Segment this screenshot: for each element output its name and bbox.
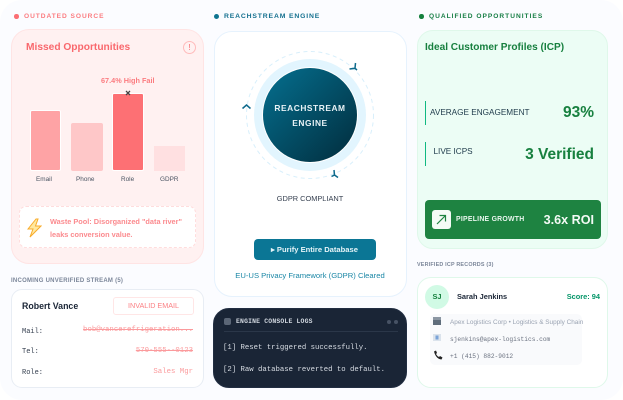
heading: incoming stream: INCOMING UNVERIFIED STREAM (5) <box>11 278 123 284</box>
axis labels: Email <box>36 176 52 183</box>
panel: ideal customer profiles <box>417 30 608 249</box>
name: Sarah Jenkins <box>457 292 507 301</box>
row: role: Role: <box>22 369 43 377</box>
contact details <box>430 314 582 365</box>
marker: x <box>126 90 130 96</box>
row: mail <box>22 326 193 336</box>
axis labels: Role <box>121 176 134 183</box>
bar: phone <box>71 123 103 171</box>
row: role <box>22 368 193 377</box>
metric: live icps <box>425 142 596 166</box>
avatar <box>425 285 449 309</box>
row: tel <box>22 347 193 356</box>
panel: pipeline growth <box>425 200 601 239</box>
bar: gdpr <box>154 146 185 171</box>
button: purify: ▸ Purify Entire Database <box>271 244 358 254</box>
metric: average engagement <box>425 101 596 125</box>
waste pool text <box>50 217 182 239</box>
callout: waste pool <box>19 206 196 248</box>
text: framework cleared: EU-US Privacy Framework (GDPR) Cleared <box>235 270 385 280</box>
row: role: Sales Mgr <box>153 368 193 376</box>
button: purify <box>254 238 376 260</box>
badge: invalid email <box>113 297 194 315</box>
panel: console <box>213 308 407 388</box>
metric: average engagement: 93% <box>563 104 594 121</box>
icon: email <box>433 334 441 341</box>
metric: average engagement: AVERAGE ENGAGEMENT <box>430 108 529 117</box>
bar chart <box>30 90 185 183</box>
panel: pipeline growth: PIPELINE GROWTH <box>456 216 524 223</box>
icon: building <box>433 317 441 325</box>
waste pool text: leaks conversion value. <box>50 230 132 239</box>
icon: alert: ! <box>188 43 191 52</box>
log line 1: [1] Reset triggered successfully. <box>223 344 368 352</box>
panel: missed opportunities <box>11 29 204 264</box>
row: tel: 570-555--0123 <box>136 347 193 355</box>
row: mail: Mail: <box>22 328 43 336</box>
section header: outdated source: OUTDATED SOURCE <box>24 13 104 20</box>
axis labels <box>36 176 178 183</box>
console header: ENGINE CONSOLE LOGS <box>236 318 313 325</box>
score: Score: 94 <box>567 292 600 301</box>
bar: email <box>30 110 61 171</box>
contact details: Apex Logistics Corp • Logistics & Supply Chain <box>450 318 583 326</box>
log line 2: [2] Raw database reverted to default. <box>223 366 385 374</box>
panel: pipeline growth: 3.6x ROI <box>544 213 594 227</box>
panel: engine <box>214 31 407 297</box>
waste pool text: Waste Pool: Disorganized "data river" <box>50 217 182 226</box>
badge: invalid email: INVALID EMAIL <box>128 301 179 310</box>
engine label <box>274 102 346 128</box>
heading: missed opportunities: Missed Opportunities <box>26 42 130 52</box>
icon: alert <box>183 41 196 54</box>
heading: icp: Ideal Customer Profiles (ICP) <box>425 42 564 53</box>
label: gdpr compliant: GDPR COMPLIANT <box>277 194 343 202</box>
metric: live icps: LIVE ICPS <box>434 147 473 156</box>
heading: verified records: VERIFIED ICP RECORDS (3) <box>417 262 494 268</box>
engine label: ENGINE <box>292 118 328 128</box>
contact details: sjenkins@apex-logistics.com <box>450 336 550 343</box>
panel: robert vance record <box>11 289 204 388</box>
panel: sarah jenkins record <box>417 277 608 388</box>
icon: lightning <box>27 218 42 238</box>
console header <box>224 316 398 332</box>
name: Robert Vance <box>22 301 78 311</box>
avatar: SJ <box>432 292 442 301</box>
icon: phone <box>434 350 442 360</box>
engine diagram <box>242 51 374 179</box>
callout: high fail: 67.4% High Fail <box>101 76 155 85</box>
icon: growth arrow <box>432 210 451 229</box>
axis labels: GDPR <box>160 176 178 183</box>
bar: role <box>112 93 144 171</box>
axis labels: Phone <box>76 176 94 183</box>
section header: reachstream engine: REACHSTREAM ENGINE <box>224 13 320 20</box>
engine label: REACHSTREAM <box>274 102 346 112</box>
contact details: +1 (415) 882-9012 <box>450 353 513 360</box>
row: mail: bob@vancerefrigeration... <box>83 326 193 334</box>
metric: live icps: 3 Verified <box>525 146 594 163</box>
row: tel: Tel: <box>22 348 39 356</box>
section header: qualified opportunities: QUALIFIED OPPORTUNITIES <box>429 13 543 20</box>
